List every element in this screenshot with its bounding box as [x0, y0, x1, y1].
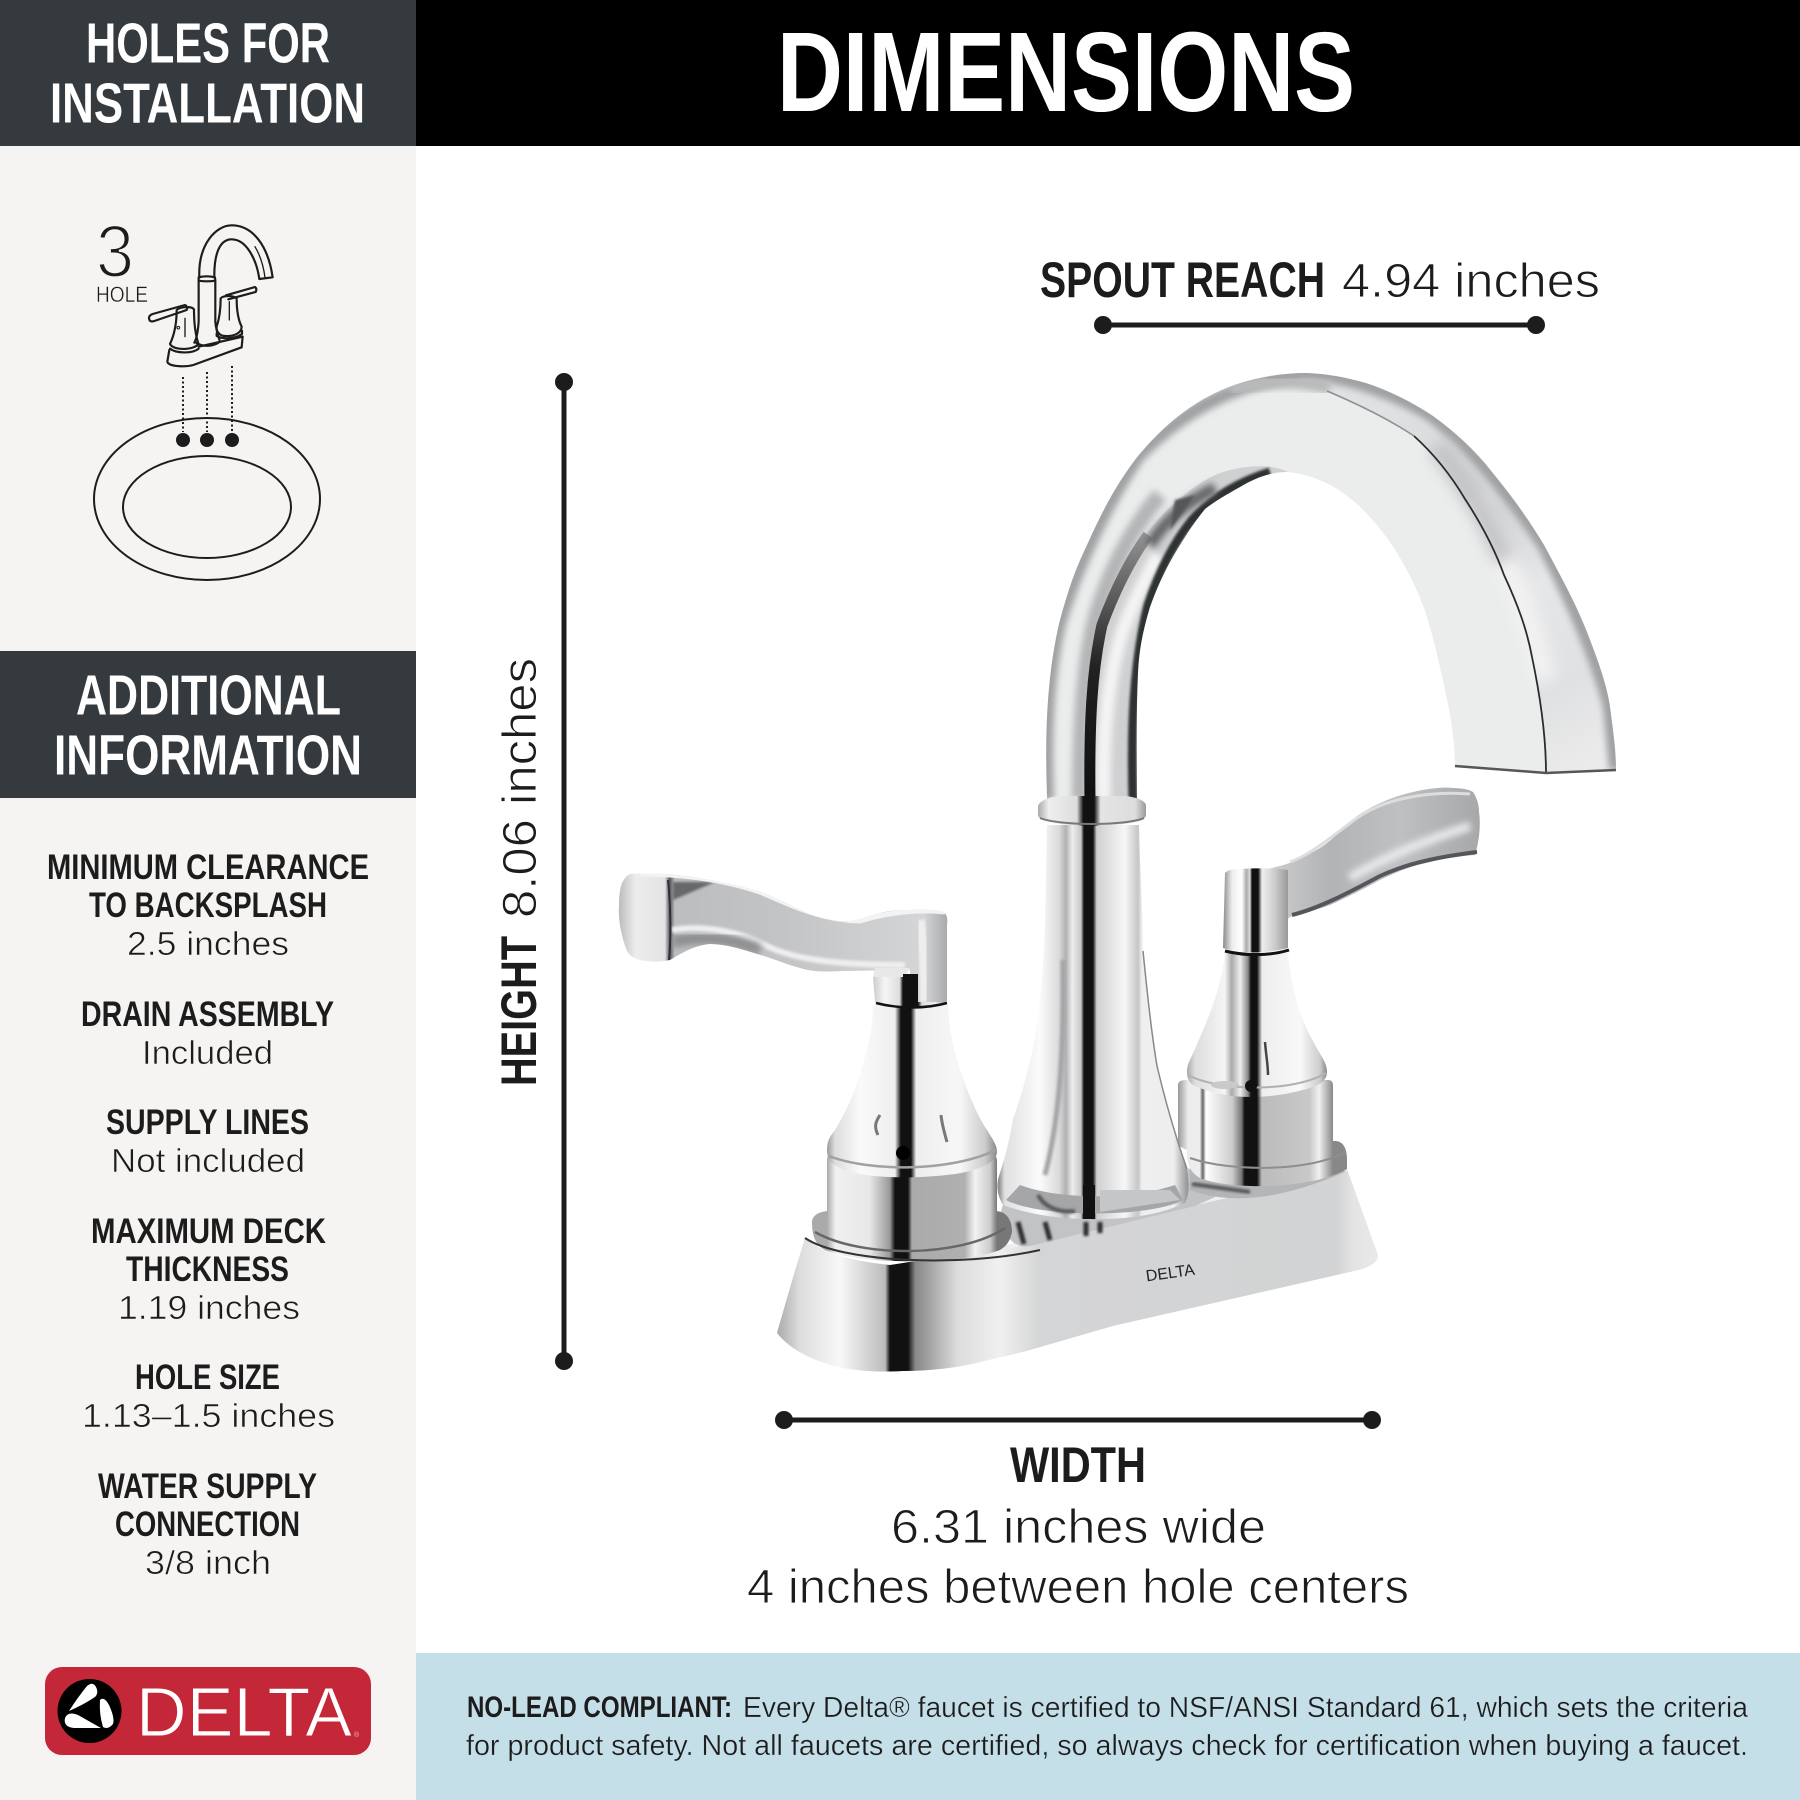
spec: hole size: HOLE SIZE: [135, 1358, 280, 1397]
faucet right valve: [1178, 953, 1347, 1186]
dimension: width: 6.31 inches wide: [891, 1501, 1266, 1554]
heading: additional information: [0, 651, 416, 798]
icon: sink outline: [94, 418, 320, 580]
spec: drain assembly: Included: [142, 1034, 273, 1071]
icon: line drawn faucet: [149, 225, 273, 366]
heading: holes for installation: INSTALLATION: [50, 72, 365, 136]
spec: maximum deck thickness: MAXIMUM DECK: [91, 1212, 326, 1251]
spec: supply lines: [106, 1103, 309, 1179]
faucet left valve: [805, 977, 1040, 1261]
faucet recess reflections: [1000, 1160, 1345, 1246]
panel: no-lead compliance banner: Every Delta® faucet is certified to NSF/ANSI Standard 61, which sets the criteria: [743, 1692, 1749, 1724]
spec: supply lines: Not included: [111, 1142, 305, 1179]
faucet left lever: [619, 873, 947, 1005]
label: 3 hole: 3: [96, 210, 134, 293]
spec: minimum clearance: MINIMUM CLEARANCE: [47, 848, 369, 887]
panel: no-lead compliance banner: NO-LEAD COMPLIANT:: [467, 1691, 732, 1724]
spec: drain assembly: [81, 995, 334, 1071]
spec: hole size: 1.13–1.5 inches: [82, 1397, 335, 1434]
heading: holes for installation: [0, 0, 416, 146]
illustration: chrome faucet: [619, 360, 1620, 1372]
dimension: height: [491, 373, 573, 1370]
dimension: width: [747, 1411, 1409, 1614]
panel: no-lead compliance banner: [416, 1653, 1800, 1800]
logo: delta: DELTA: [136, 1673, 352, 1751]
text block: specification list: [47, 848, 369, 1581]
panel: dimensions title bar: [416, 0, 1800, 146]
spec: maximum deck thickness: 1.19 inches: [118, 1289, 300, 1326]
dimension: width: 4 inches between hole centers: [747, 1561, 1409, 1614]
heading: additional information: ADDITIONAL: [76, 664, 341, 728]
dimension: height: 8.06 inches: [494, 658, 547, 918]
spec: minimum clearance: 2.5 inches: [127, 925, 289, 962]
faucet body: [997, 825, 1189, 1219]
spec: maximum deck thickness: [91, 1212, 326, 1326]
faucet deck base: DELTA: [1145, 1262, 1196, 1285]
spec: minimum clearance: [47, 848, 369, 962]
spec: minimum clearance: TO BACKSPLASH: [89, 886, 327, 925]
title: DIMENSIONS: [777, 9, 1355, 135]
logo: delta: [45, 1667, 371, 1755]
spec: supply lines: SUPPLY LINES: [106, 1103, 309, 1142]
label: 3 hole: HOLE: [96, 282, 148, 307]
spec: water supply connection: 3/8 inch: [145, 1544, 271, 1581]
spec: maximum deck thickness: THICKNESS: [126, 1250, 289, 1289]
faucet neck collar: [1038, 796, 1146, 826]
icon: three hole faucet and sink: [94, 210, 320, 580]
spec: water supply connection: WATER SUPPLY: [98, 1467, 317, 1506]
logo: delta: ®: [354, 1731, 360, 1739]
heading: holes for installation: HOLES FOR: [86, 12, 330, 76]
heading: additional information: INFORMATION: [54, 724, 362, 788]
faucet spout: [1046, 360, 1620, 802]
dimension: spout reach: [1040, 252, 1600, 334]
dimension: height: HEIGHT: [491, 936, 547, 1086]
spec: hole size: [82, 1358, 335, 1434]
spec: water supply connection: [98, 1467, 317, 1581]
dimension: width: WIDTH: [1010, 1437, 1146, 1493]
spec: water supply connection: CONNECTION: [115, 1505, 300, 1544]
panel: left sidebar: [0, 0, 416, 1800]
dimension: spout reach: SPOUT REACH: [1040, 252, 1325, 308]
label: 3 hole: [96, 210, 148, 307]
faucet right lever: [1223, 788, 1480, 955]
panel: no-lead compliance banner: for product safety. Not all faucets are certified, so always check for certification when buying a faucet.: [466, 1730, 1748, 1762]
faucet deck base: [777, 1169, 1378, 1372]
spec: drain assembly: DRAIN ASSEMBLY: [81, 995, 334, 1034]
icon: dotted guide lines and holes: [176, 366, 239, 447]
dimension: spout reach: 4.94 inches: [1342, 255, 1600, 308]
